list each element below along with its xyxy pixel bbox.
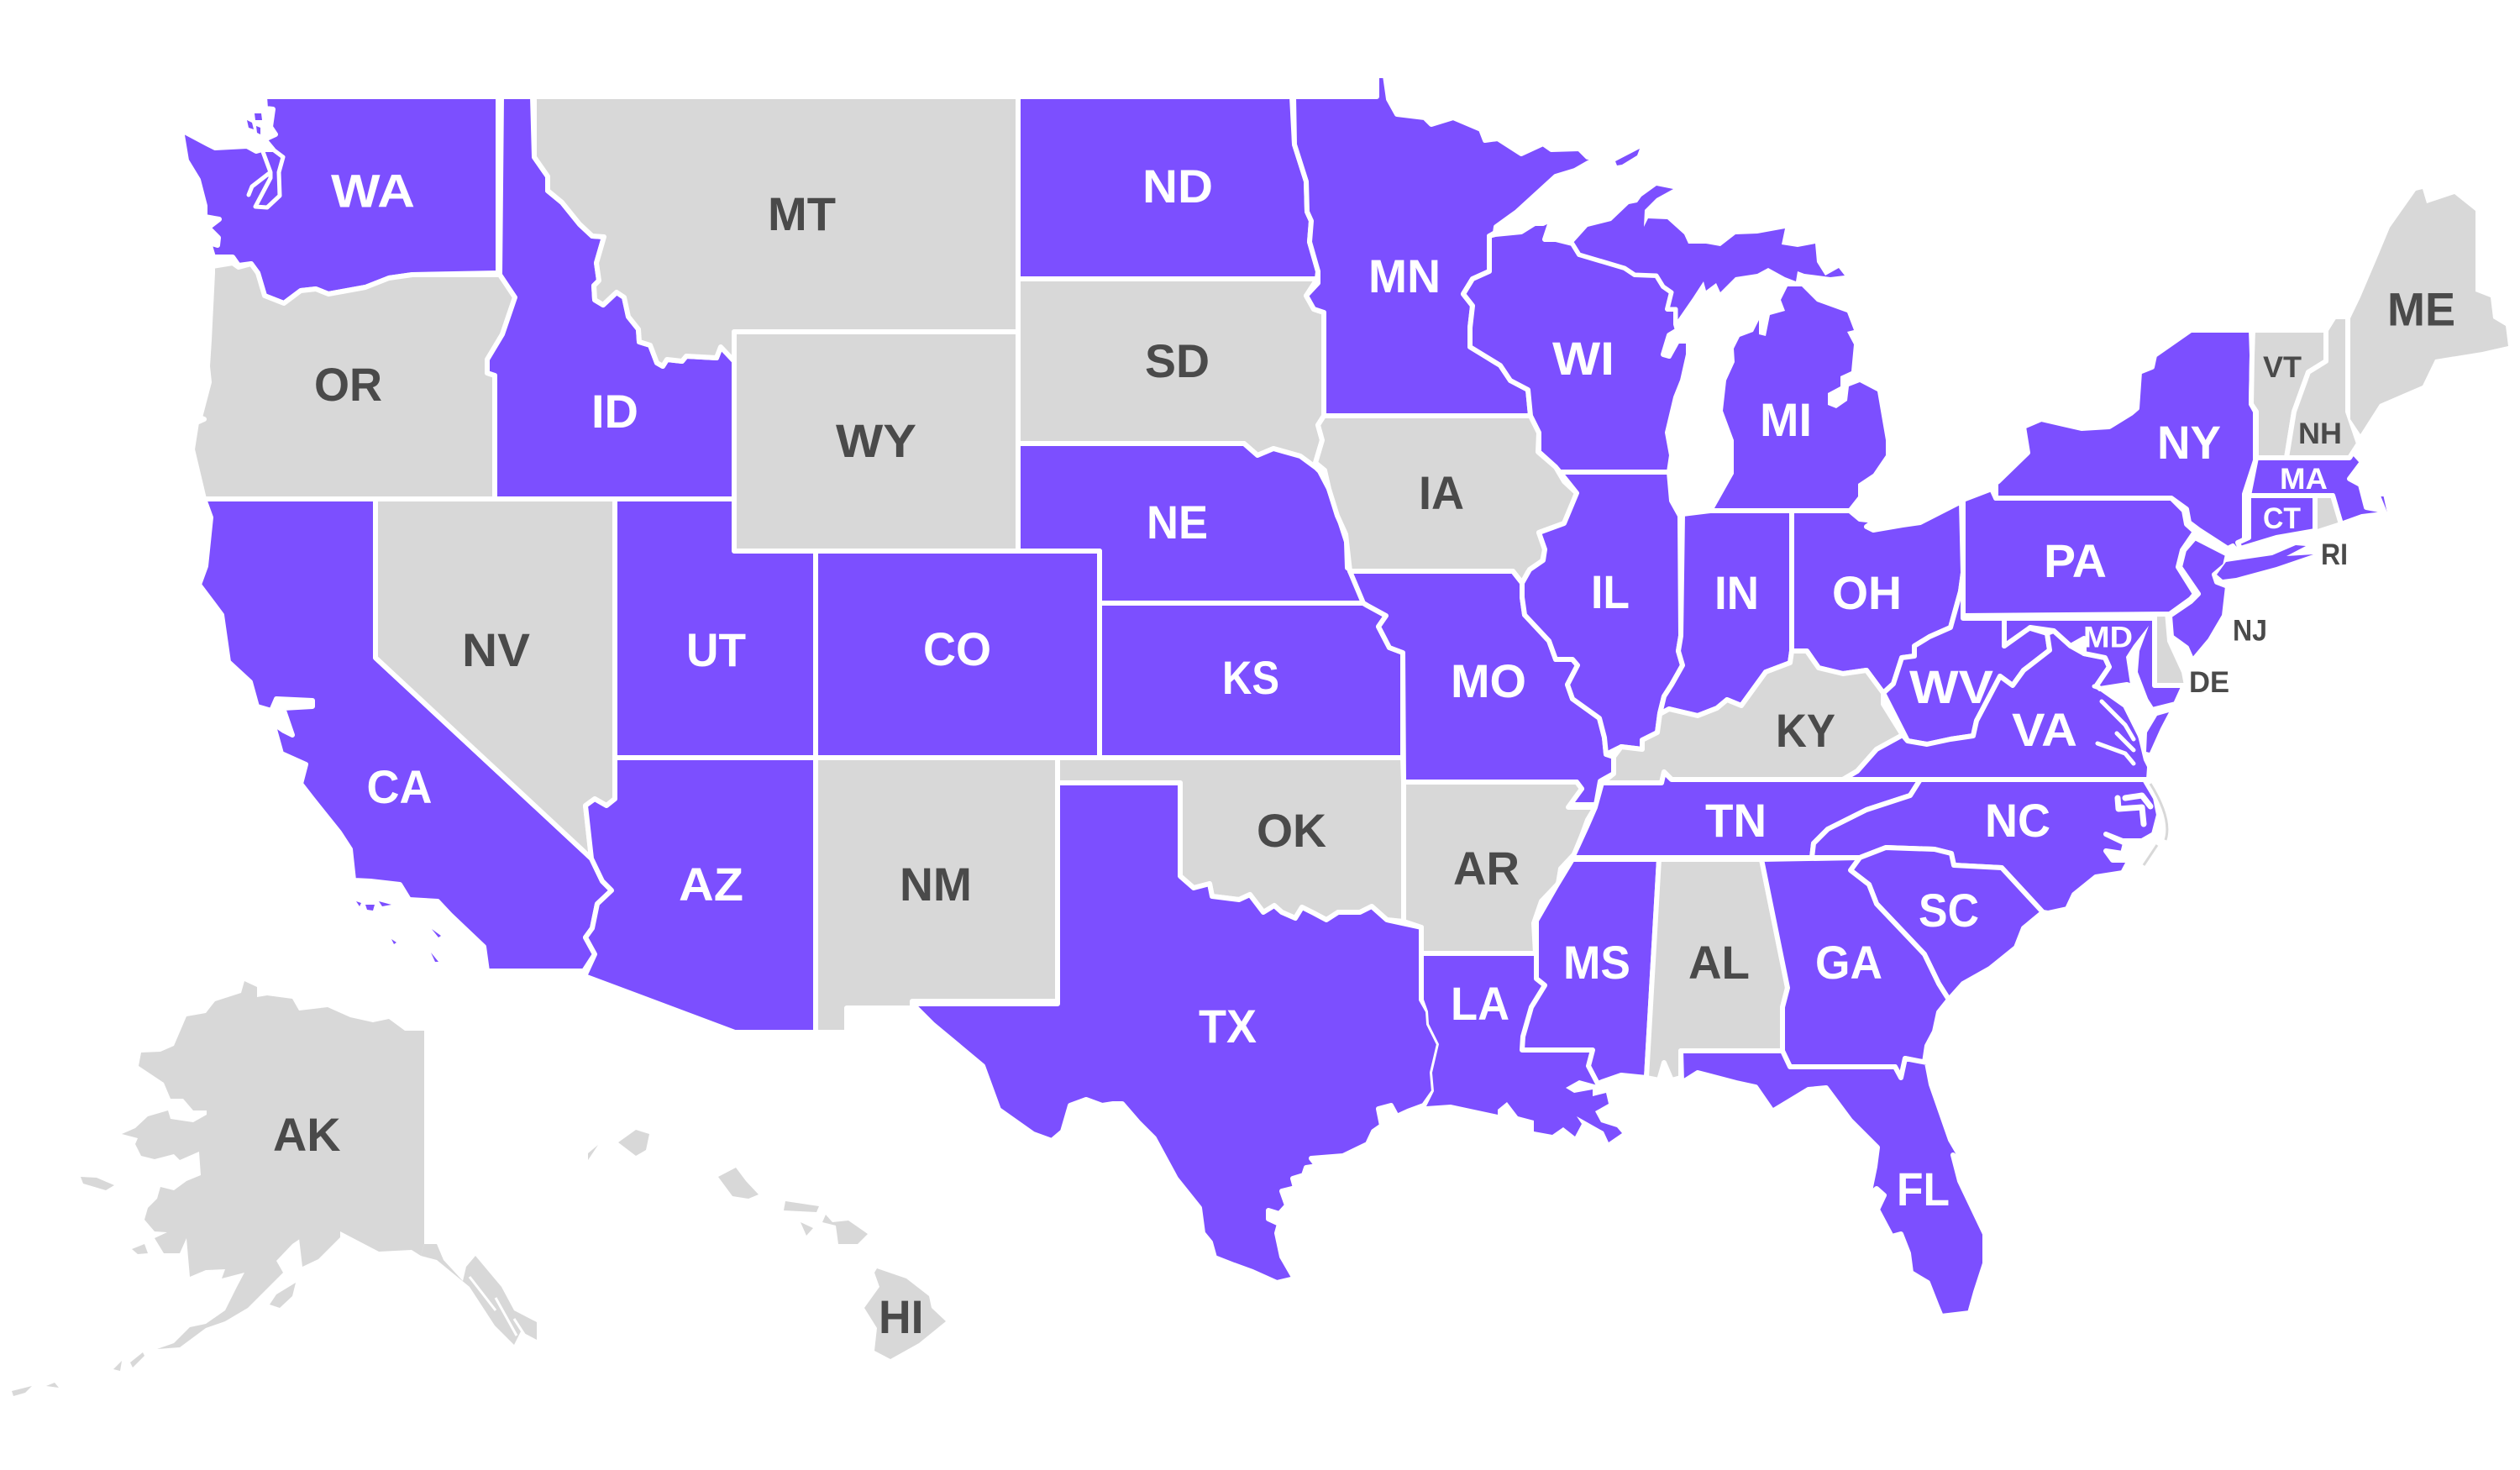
state: Illinois bbox=[1522, 472, 1683, 754]
state: Montana bbox=[534, 97, 1018, 366]
state: Utah bbox=[615, 499, 816, 758]
state: New York bbox=[1996, 330, 2313, 580]
state: Connecticut bbox=[2238, 496, 2315, 549]
Chesapeake Bay, rivers and Eastern Shore bbox=[2094, 626, 2184, 777]
state: North Carolina bbox=[1812, 780, 2167, 913]
state: Oregon bbox=[192, 263, 515, 499]
state: Arizona: AZ bbox=[679, 858, 743, 911]
state: Oregon: OR bbox=[314, 358, 382, 411]
state: Maryland: MD bbox=[2083, 622, 2133, 654]
state: Maine bbox=[2350, 189, 2508, 434]
state: Hawaii bbox=[588, 1130, 946, 1359]
state: Georgia: GA bbox=[1815, 936, 1882, 989]
state: Connecticut: CT bbox=[2263, 502, 2301, 535]
state: New Jersey: NJ bbox=[2233, 615, 2267, 647]
state: New Hampshire: NH bbox=[2298, 417, 2342, 450]
state: Florida: FL bbox=[1897, 1163, 1950, 1215]
state: South Dakota bbox=[1018, 279, 1324, 468]
state: Kentucky: KY bbox=[1776, 704, 1835, 757]
state: Missouri: MO bbox=[1451, 654, 1526, 707]
state: Michigan bbox=[1572, 186, 1886, 508]
state: Pennsylvania bbox=[1963, 489, 2195, 616]
state: Delaware bbox=[2155, 612, 2229, 699]
state: Kansas: KS bbox=[1222, 651, 1279, 704]
state: North Carolina: NC bbox=[1985, 794, 2050, 847]
state: Iowa bbox=[1315, 416, 1577, 583]
state: Kentucky bbox=[1602, 651, 1903, 783]
state: Nevada: NV bbox=[462, 623, 530, 676]
state: Virginia bbox=[1843, 631, 2150, 780]
state: Nebraska: NE bbox=[1147, 496, 1208, 549]
state: West Virginia: WV bbox=[1909, 660, 1993, 713]
state: Wisconsin bbox=[1463, 219, 1688, 472]
state: Hawaii: HI bbox=[879, 1290, 924, 1343]
state: Alaska bbox=[12, 981, 537, 1396]
state: Louisiana bbox=[1424, 956, 1622, 1142]
state: Arkansas bbox=[1404, 782, 1595, 953]
state: West Virginia bbox=[1883, 573, 2050, 744]
state: Massachusetts bbox=[2249, 453, 2390, 524]
state: Minnesota bbox=[1294, 76, 1640, 416]
state: Arizona bbox=[585, 758, 816, 1032]
state: Kansas bbox=[1100, 603, 1403, 758]
state: South Carolina: SC bbox=[1919, 884, 1979, 937]
state: New York: NY bbox=[2157, 416, 2221, 469]
state: Rhode Island bbox=[2315, 496, 2348, 571]
state: Tennessee bbox=[1572, 772, 1920, 858]
state: Missouri bbox=[1350, 571, 1614, 805]
state: Massachusetts: MA bbox=[2280, 463, 2328, 496]
state: Texas bbox=[912, 783, 1439, 1283]
state: Rhode Island: RI bbox=[2321, 538, 2348, 571]
state: Mississippi bbox=[1522, 859, 1659, 1084]
state: Oklahoma: OK bbox=[1257, 804, 1326, 857]
state: Alabama: AL bbox=[1688, 936, 1750, 989]
state: Wisconsin: WI bbox=[1552, 332, 1614, 385]
state: Ohio bbox=[1792, 501, 1963, 693]
state: Georgia bbox=[1761, 858, 1949, 1078]
state: Wyoming: WY bbox=[836, 414, 916, 467]
state: New Jersey bbox=[2170, 538, 2267, 661]
state: Delaware: DE bbox=[2189, 666, 2229, 699]
state: Alabama bbox=[1646, 859, 1788, 1080]
state: Maine: ME bbox=[2387, 282, 2455, 336]
state: Idaho: ID bbox=[591, 385, 638, 438]
state: North Dakota: ND bbox=[1142, 160, 1213, 213]
state: Vermont bbox=[2251, 330, 2326, 458]
state: Virginia: VA bbox=[2012, 703, 2077, 756]
state: California: CA bbox=[366, 760, 432, 813]
state: Pennsylvania: PA bbox=[2044, 534, 2107, 587]
state: Utah: UT bbox=[686, 623, 746, 676]
state: New Hampshire bbox=[2286, 317, 2359, 458]
state: South Dakota: SD bbox=[1145, 334, 1210, 387]
state: Iowa: IA bbox=[1419, 466, 1464, 519]
state: Indiana: IN bbox=[1714, 566, 1759, 619]
state: Nebraska bbox=[1018, 444, 1363, 603]
state: Washington: WA bbox=[331, 165, 415, 217]
state: Oklahoma bbox=[1058, 758, 1404, 921]
state: Texas: TX bbox=[1199, 1000, 1257, 1053]
state: Mississippi: MS bbox=[1563, 936, 1630, 989]
state: Colorado: CO bbox=[923, 622, 991, 675]
state: Montana: MT bbox=[768, 187, 836, 240]
state: Florida bbox=[1681, 1051, 1985, 1316]
state: Illinois: IL bbox=[1591, 565, 1630, 618]
state: Indiana bbox=[1660, 511, 1792, 716]
state: Minnesota: MN bbox=[1368, 249, 1441, 302]
state: Ohio: OH bbox=[1832, 566, 1902, 619]
state: Arkansas: AR bbox=[1453, 842, 1520, 895]
state: South Carolina bbox=[1851, 848, 2043, 1000]
state: Idaho bbox=[487, 97, 734, 499]
state: Maryland bbox=[2004, 618, 2184, 710]
state: Louisiana: LA bbox=[1451, 977, 1509, 1030]
state: Alaska: AK bbox=[273, 1108, 341, 1161]
state: Vermont: VT bbox=[2263, 351, 2302, 384]
state: Washington bbox=[181, 97, 498, 303]
state: Wyoming bbox=[734, 332, 1018, 551]
state: New Mexico: NM bbox=[900, 858, 972, 911]
state: Michigan: MI bbox=[1760, 393, 1812, 446]
state: Tennessee: TN bbox=[1705, 794, 1767, 847]
state: Nevada bbox=[375, 499, 615, 858]
state: North Dakota bbox=[1018, 97, 1318, 279]
state: Colorado bbox=[816, 551, 1100, 758]
state: New Mexico bbox=[816, 758, 1058, 1032]
state: California bbox=[199, 499, 612, 971]
